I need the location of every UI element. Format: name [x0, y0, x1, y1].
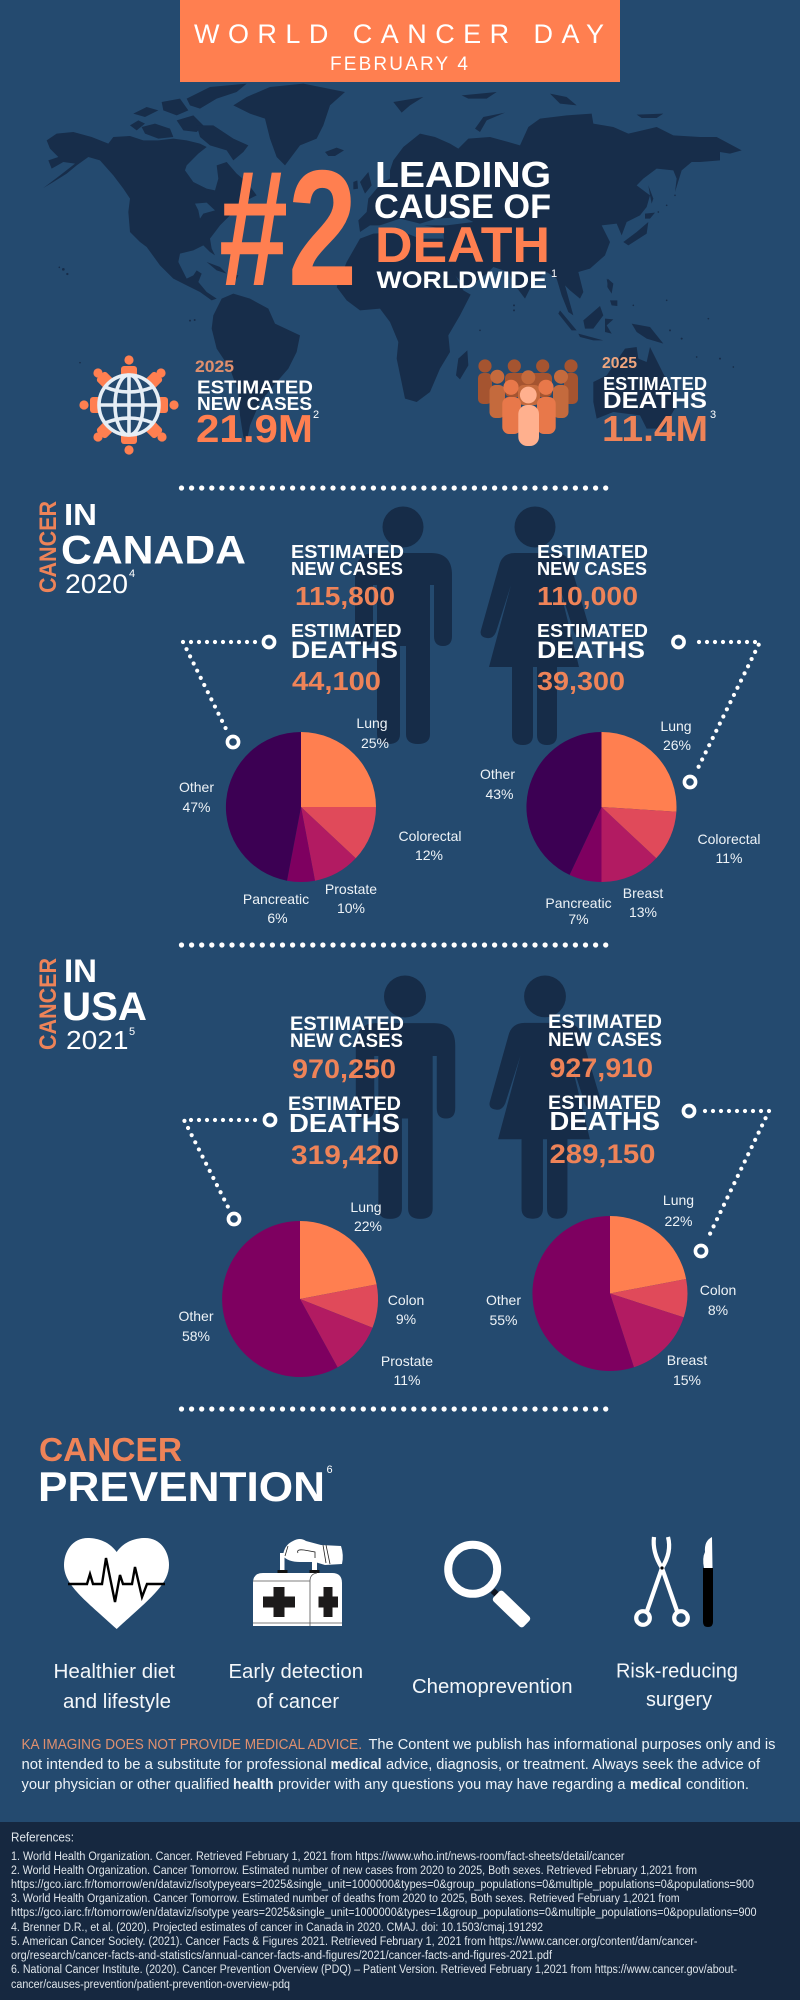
stats: USA women: NEW CASES: [548, 1030, 662, 1051]
title: #2 leading cause of death: WORLDWIDE: [376, 267, 547, 294]
icon: globe with people: [79, 355, 179, 455]
heading: cancer prevention: [38, 1431, 333, 1510]
stats: Canada women: 39,300: [537, 668, 625, 696]
title: #2 leading cause of death: DEATH: [375, 217, 550, 273]
pie chart: Canada women: Colorectal: [697, 831, 761, 847]
prevention label: risk-reducing surgery: surgery: [646, 1689, 712, 1711]
world map background: [43, 84, 742, 442]
header banner: FEBRUARY 4: [330, 54, 468, 75]
stats: USA men: ESTIMATED: [288, 1094, 401, 1115]
disclaimer text: your physician or other qualified: [22, 1777, 230, 1793]
pie chart: Canada men: 6%: [267, 910, 288, 926]
stats: USA women: [548, 1012, 662, 1169]
stat: 2025 estimated deaths: 11.4M: [602, 408, 708, 449]
pie chart: USA women: 15%: [673, 1372, 701, 1388]
stat: 2025 estimated new cases: 2: [313, 409, 319, 421]
prevention label: chemoprevention: Chemoprevention: [412, 1676, 572, 1698]
prevention label: risk-reducing surgery: Risk-reducing: [616, 1661, 738, 1683]
pie chart: Canada men: Lung: [356, 715, 388, 731]
references panel: References:: [11, 1830, 74, 1845]
connector: Canada women: [673, 636, 760, 788]
disclaimer text: [22, 1737, 776, 1793]
pie chart: USA women: 55%: [489, 1312, 518, 1328]
stats: Canada women: ESTIMATED: [537, 620, 648, 641]
icon: magnifying glass: [448, 1545, 531, 1629]
disclaimer text: provider with any questions you may have regarding a: [278, 1777, 626, 1793]
pie chart: USA men: [178, 1199, 433, 1388]
section heading: cancer in Canada: 2020: [65, 569, 128, 599]
section heading: cancer in Canada: CANADA: [61, 528, 246, 572]
header banner: WORLD CANCER DAY: [194, 19, 604, 49]
disclaimer text: medical: [630, 1777, 682, 1793]
pie chart: Canada women: 43%: [485, 786, 514, 802]
connector: USA men: [184, 1114, 276, 1225]
references panel: [0, 1822, 800, 2000]
stats: USA women: 927,910: [550, 1053, 653, 1083]
stats: Canada women: NEW CASES: [537, 558, 647, 579]
stats: USA men: [288, 1014, 404, 1170]
stat: 2025 estimated deaths: [602, 355, 716, 449]
pie chart: Canada men: 25%: [361, 735, 389, 751]
pie chart: Canada men: Prostate: [325, 881, 377, 897]
pie chart: Canada women: Other: [480, 766, 515, 782]
section heading: cancer in Canada: CANCER: [35, 501, 62, 593]
prevention label: risk-reducing surgery: [616, 1661, 738, 1711]
pie chart: USA men: Prostate: [381, 1353, 433, 1369]
heading: cancer prevention: 6: [326, 1464, 333, 1476]
pie chart: USA women: Colon: [700, 1282, 736, 1298]
stats: Canada women: DEATHS: [537, 637, 645, 664]
pie chart: USA women: [486, 1192, 736, 1388]
references panel: https://gco.iarc.fr/tomorrow/en/dataviz/isotypeyears=2025&single_unit=1000000&types=0&group_populations=0&multiple_populations=0&populations=900: [11, 1879, 754, 1891]
icon: first aid kit with hand: [253, 1539, 343, 1626]
stats: USA men: 970,250: [292, 1054, 396, 1084]
pie chart: USA men: 58%: [182, 1328, 210, 1344]
stats: USA women: 289,150: [550, 1139, 656, 1169]
stat: 2025 estimated deaths: ESTIMATED: [603, 374, 707, 394]
stats: Canada men: [291, 541, 404, 696]
pie chart: USA women: Breast: [667, 1352, 707, 1368]
stats: Canada men: NEW CASES: [291, 558, 403, 579]
references panel: 5. American Cancer Society. (2021). Cancer Facts & Figures 2021. Retrieved February 1, 2021 from https://www.cancer.org/content/dam/cancer-: [11, 1936, 698, 1948]
section heading: cancer in USA: 2021: [66, 1025, 128, 1055]
disclaimer text: KA IMAGING DOES NOT PROVIDE MEDICAL ADVICE.: [22, 1737, 362, 1753]
pie chart: USA women: 22%: [664, 1213, 693, 1229]
pie chart: Canada men: Other: [179, 779, 214, 795]
disclaimer text: advice, diagnosis, or treatment. Always seek the advice of: [386, 1757, 761, 1773]
pie chart: USA women: Other: [486, 1292, 521, 1308]
stats: Canada men: ESTIMATED: [291, 620, 402, 641]
pie chart: Canada men: 47%: [182, 799, 211, 815]
references panel: 2. World Health Organization. Cancer Tomorrow. Estimated number of new cases from 2020 to 2025, Both sexes. Retrieved February 1,2021 from: [11, 1865, 697, 1877]
pie chart: USA men: Other: [178, 1308, 214, 1324]
pie chart: Canada women: Pancreatic: [545, 895, 612, 911]
icon: woman silhouette USA: [490, 975, 601, 1219]
pie chart: Canada women: 26%: [663, 737, 691, 753]
pie chart: USA women: 8%: [708, 1302, 728, 1318]
pie chart: USA men: 9%: [396, 1311, 416, 1327]
stats: Canada men: 115,800: [295, 583, 395, 611]
pie chart: USA men: Colon: [388, 1292, 424, 1308]
section heading: cancer in Canada: [35, 497, 246, 599]
prevention label: early detection: of cancer: [256, 1691, 339, 1713]
stats: Canada men: 44,100: [292, 668, 381, 696]
icon: man silhouette USA: [356, 975, 455, 1219]
section heading: cancer in USA: CANCER: [35, 958, 62, 1050]
section heading: cancer in USA: IN: [64, 953, 97, 989]
pie chart: Canada men: 10%: [337, 900, 365, 916]
pie chart: Canada men: Pancreatic: [243, 891, 309, 907]
stats: USA men: NEW CASES: [290, 1031, 403, 1052]
disclaimer text: medical: [330, 1757, 382, 1773]
pie chart: Canada women: 7%: [568, 911, 589, 927]
disclaimer text: condition.: [686, 1777, 749, 1793]
stats: USA women: ESTIMATED: [548, 1093, 661, 1114]
references panel: 3. World Health Organization. Cancer Tomorrow. Estimated number of deaths from 2020 to 2025, Both sexes. Retrieved February 1,2021 from: [11, 1893, 680, 1905]
stats: USA women: ESTIMATED: [548, 1012, 662, 1033]
pie chart: Canada women: Lung: [660, 718, 692, 734]
icon: forceps and scalpel: [636, 1537, 713, 1627]
pie chart: USA men: Lung: [350, 1199, 382, 1215]
pie chart: Canada women: 11%: [716, 850, 742, 866]
stat: 2025 estimated deaths: 3: [710, 409, 716, 421]
stats: Canada women: [537, 541, 648, 696]
section heading: cancer in Canada: IN: [64, 497, 97, 532]
references panel: cancer/causes-prevention/patient-prevention-overview-pdq: [11, 1979, 290, 1991]
pie chart: Canada men: 12%: [415, 847, 443, 863]
stat: 2025 estimated deaths: 2025: [602, 355, 637, 372]
heading: cancer prevention: CANCER: [39, 1431, 182, 1468]
prevention label: healthier diet: and lifestyle: [63, 1691, 171, 1713]
icon: woman silhouette Canada: [481, 506, 590, 745]
stats: USA men: DEATHS: [289, 1108, 400, 1138]
prevention label: early detection: [228, 1661, 363, 1713]
connector: USA women: [683, 1105, 769, 1257]
stats: Canada men: ESTIMATED: [291, 541, 404, 562]
pie chart: Canada women: Breast: [623, 885, 663, 901]
stats: USA men: ESTIMATED: [290, 1014, 404, 1035]
pie chart: Canada men: Colorectal: [398, 828, 462, 844]
references panel: 1. World Health Organization. Cancer. Retrieved February 1, 2021 from https://www.who.int/news-room/fact-sheets/detail/cancer: [11, 1851, 625, 1863]
pie chart: USA women: Lung: [663, 1192, 694, 1208]
stats: USA women: DEATHS: [550, 1106, 660, 1136]
prevention label: early detection: Early detection: [228, 1661, 363, 1683]
stat: 2025 estimated new cases: 21.9M: [196, 408, 313, 451]
references panel: 6. National Cancer Institute. (2020). Cancer Prevention Overview (PDQ) – Patient Version. Retrieved February 1,2021 from https://www.cancer.gov/about-: [11, 1964, 737, 1976]
title: #2 leading cause of death: LEADING: [375, 154, 551, 195]
references panel: https://gco.iarc.fr/tomorrow/en/dataviz/isotype years=2025&single_unit=1000000&types=1&group_populations=0&multiple_populations=0&populations=900: [11, 1907, 757, 1919]
section heading: cancer in USA: [35, 953, 147, 1055]
pie chart: Canada women: [480, 718, 761, 927]
icon: heart with pulse: [64, 1538, 169, 1629]
section heading: cancer in USA: USA: [62, 985, 147, 1029]
prevention label: healthier diet: [54, 1661, 175, 1713]
disclaimer text: health: [233, 1777, 274, 1793]
heading: cancer prevention: PREVENTION: [38, 1463, 325, 1510]
references panel: 4. Brenner D.R., et al. (2020). Projected estimates of cancer in Canada in 2020. CMAJ. doi: 10.1503/cmaj.191292: [11, 1922, 543, 1934]
pie chart: Canada women: 13%: [629, 904, 657, 920]
title: #2 leading cause of death: #2: [219, 136, 357, 320]
pie chart: Canada men: [179, 715, 462, 926]
icon: man silhouette Canada: [355, 506, 452, 744]
references panel: org/research/cancer-facts-and-statistics/annual-cancer-facts-and-figures/2021/cancer-facts-and-figures-2021.pdf: [11, 1950, 553, 1962]
title: #2 leading cause of death: [219, 136, 557, 320]
header banner: [180, 0, 620, 82]
stat: 2025 estimated new cases: NEW CASES: [197, 394, 312, 414]
pie chart: USA men: 22%: [354, 1218, 382, 1234]
stats: Canada women: ESTIMATED: [537, 541, 648, 562]
section heading: cancer in USA: 5: [129, 1026, 135, 1038]
stats: USA men: 319,420: [291, 1140, 399, 1170]
stat: 2025 estimated new cases: ESTIMATED: [197, 378, 313, 398]
stat: 2025 estimated new cases: 2025: [195, 358, 234, 376]
title: #2 leading cause of death: 1: [551, 268, 557, 280]
stats: Canada men: DEATHS: [291, 637, 398, 664]
icon: crowd of people: [478, 359, 578, 446]
disclaimer text: The Content we publish has informational purposes only and is: [368, 1737, 776, 1753]
stat: 2025 estimated deaths: DEATHS: [603, 387, 707, 413]
stat: 2025 estimated new cases: [195, 358, 319, 451]
prevention label: healthier diet: Healthier diet: [54, 1661, 175, 1683]
title: #2 leading cause of death: CAUSE OF: [374, 188, 551, 226]
connector: Canada men: [183, 636, 275, 748]
disclaimer text: not intended to be a substitute for professional: [22, 1757, 326, 1773]
pie chart: USA men: 11%: [394, 1372, 420, 1388]
stats: Canada women: 110,000: [537, 583, 638, 611]
section heading: cancer in Canada: 4: [129, 568, 135, 580]
